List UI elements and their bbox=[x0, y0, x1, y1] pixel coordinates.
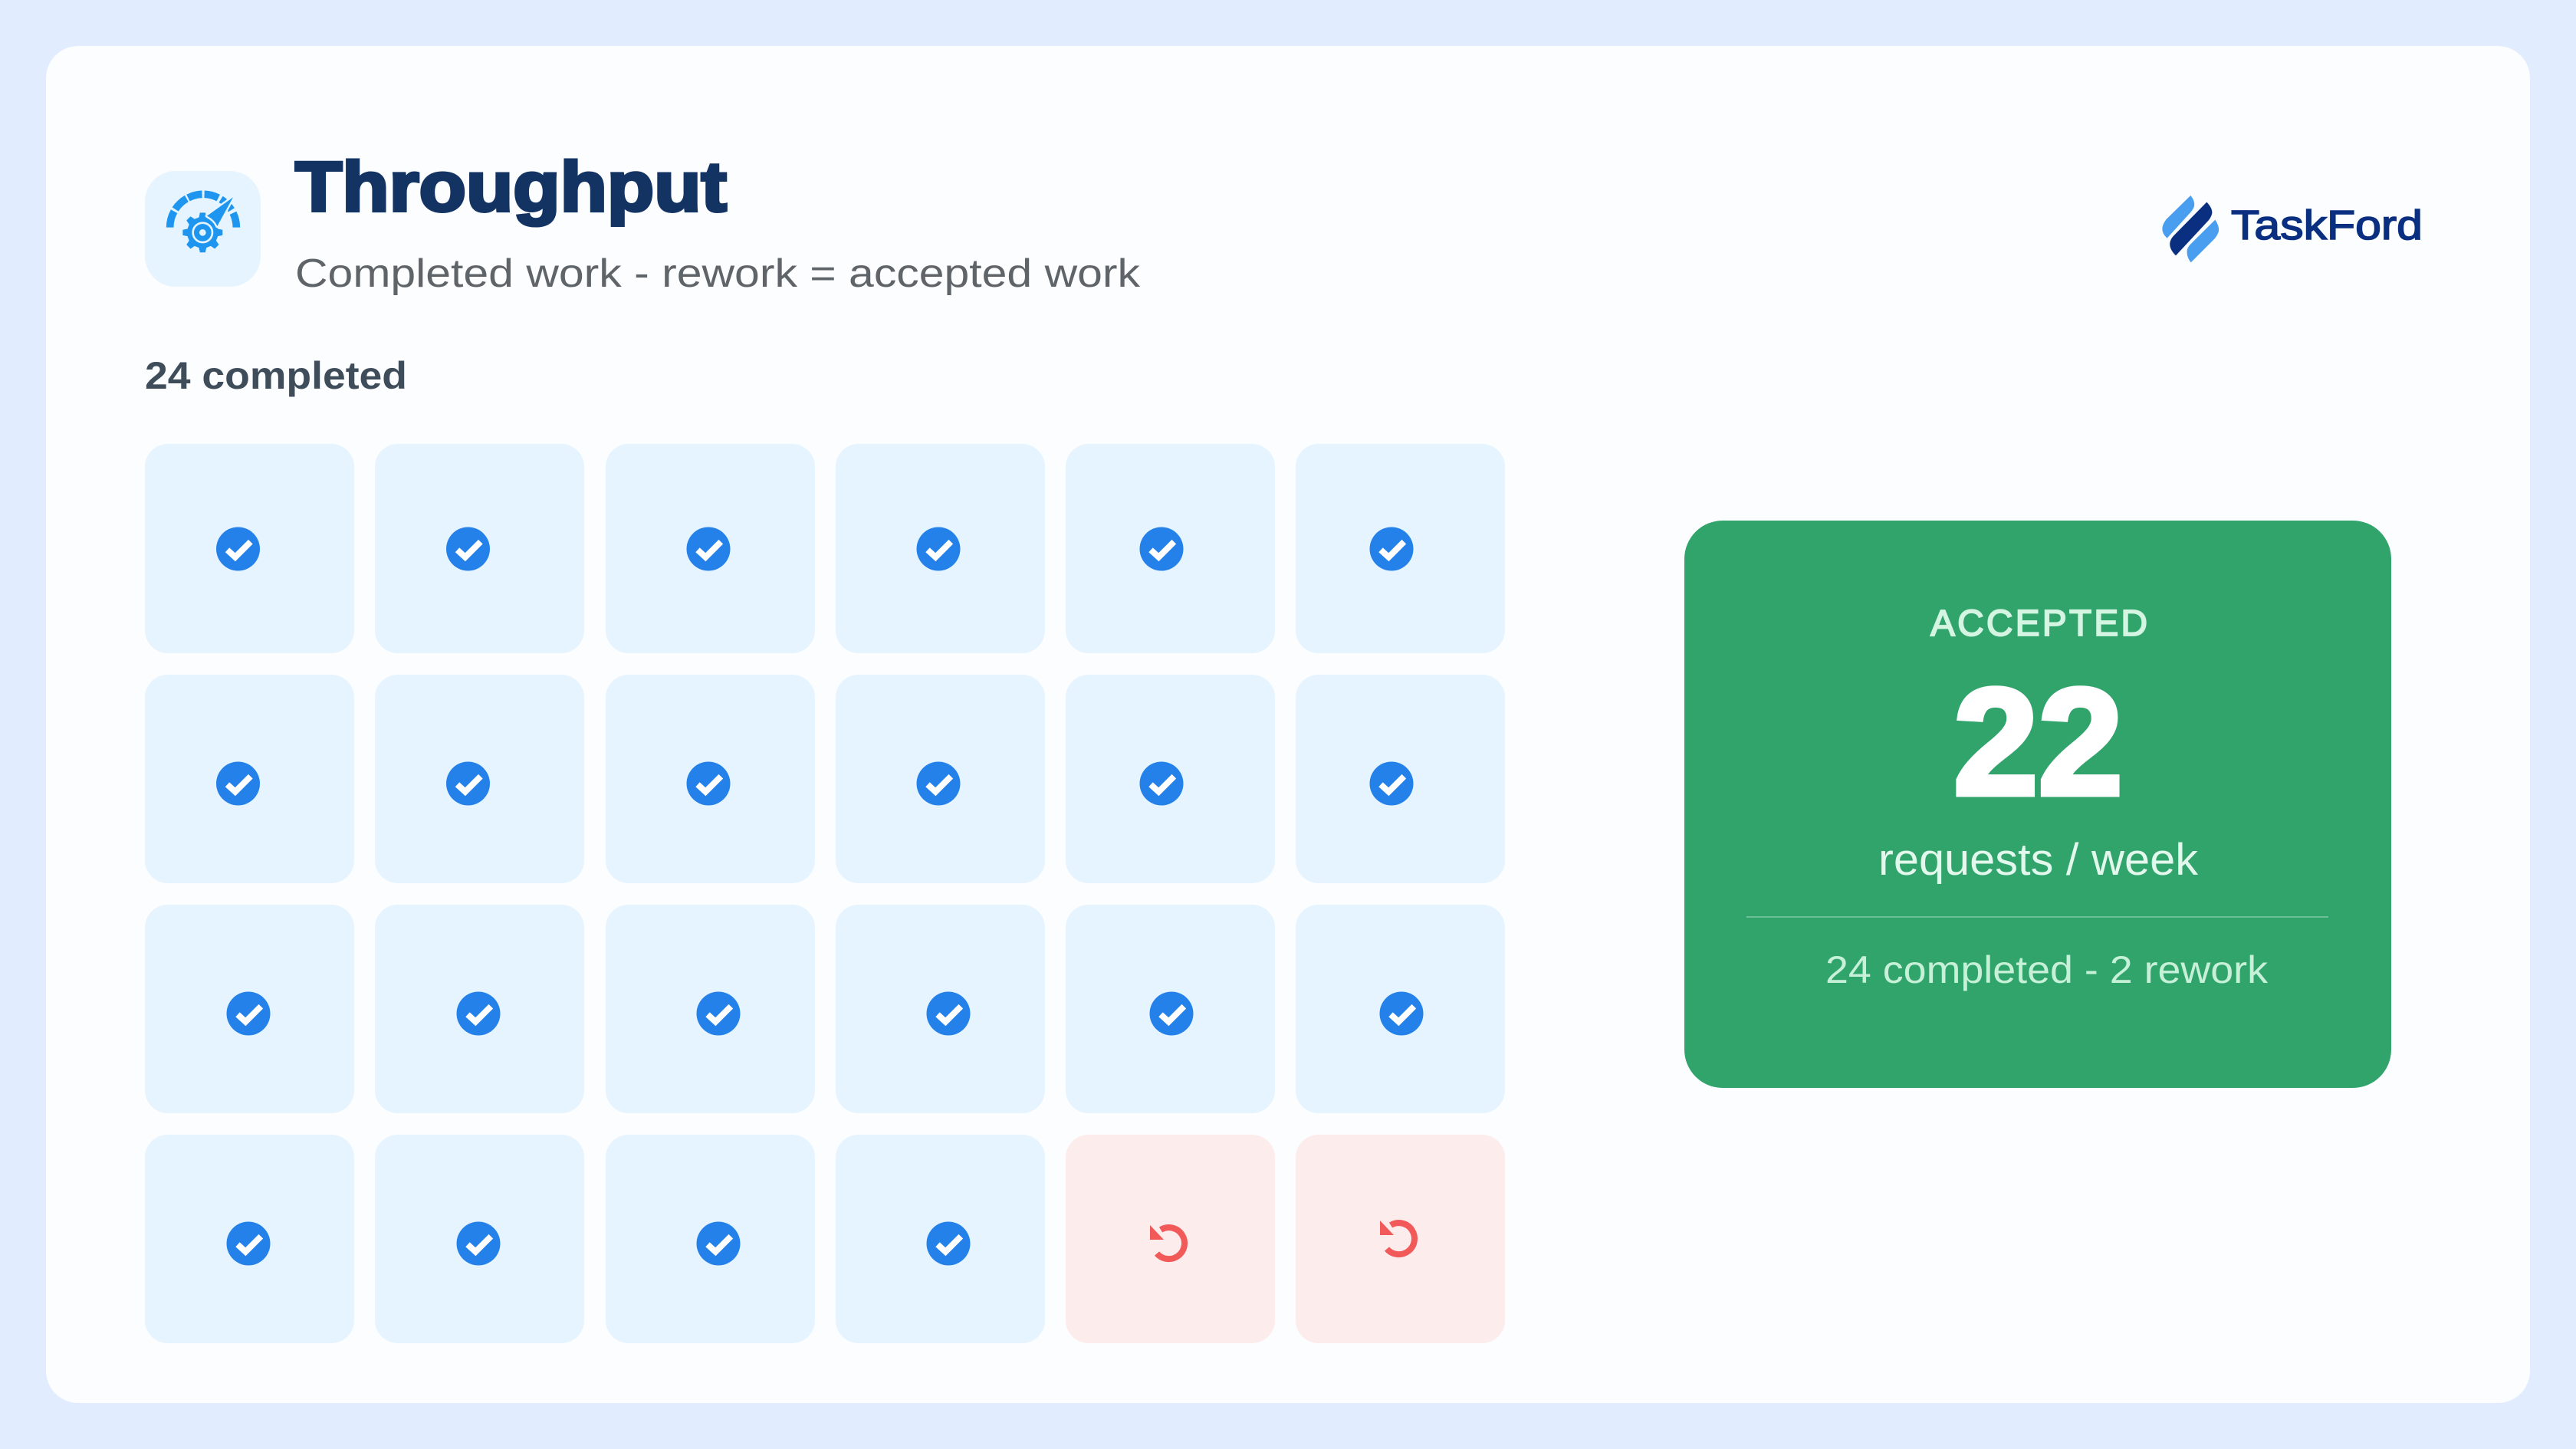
row 4 with two rework tiles bbox=[145, 1135, 1505, 1343]
row 1 bbox=[145, 444, 1505, 653]
icon: gauge with gear bbox=[145, 171, 261, 287]
accepted label: ACCEPTED bbox=[1930, 603, 2147, 644]
subtitle: Completed work - rework = accepted work bbox=[295, 251, 1141, 296]
row 2 bbox=[145, 675, 1505, 883]
title: Throughput bbox=[295, 148, 727, 226]
panel: accepted result bbox=[1684, 521, 2391, 1088]
section label: 24 completed: 24 completed bbox=[145, 354, 407, 397]
logo: TaskFord bbox=[2162, 196, 2423, 262]
formula: 24 completed - 2 rework bbox=[1825, 948, 2269, 991]
tile grid: 24 completed items bbox=[145, 444, 1505, 1343]
big number: 22 bbox=[1953, 657, 2123, 826]
logo: TaskFord: TaskFord bbox=[2231, 202, 2423, 248]
row 3 bbox=[145, 905, 1505, 1113]
unit: requests / week bbox=[1878, 835, 2199, 885]
